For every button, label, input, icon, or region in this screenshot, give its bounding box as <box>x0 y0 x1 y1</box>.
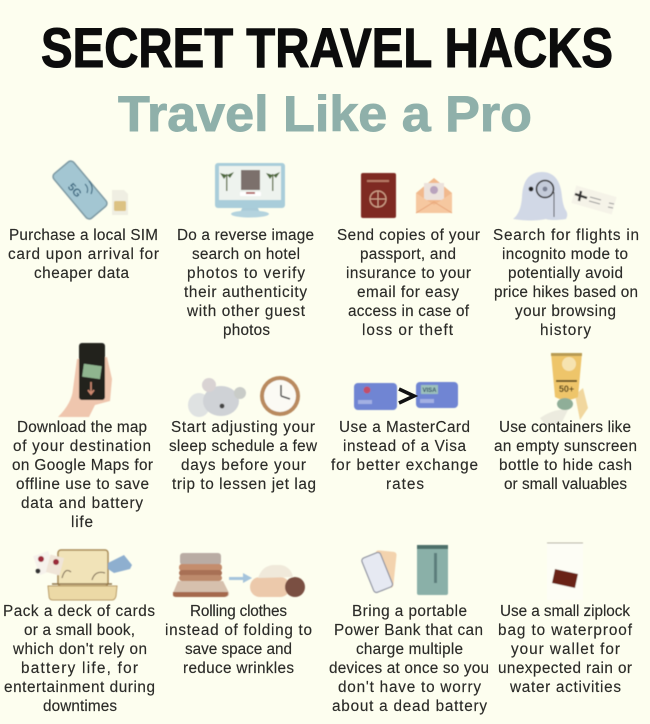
tip text: insurance to your <box>346 265 471 282</box>
tip text: Use a small ziplock <box>500 603 630 620</box>
tip text: trip to lessen jet lag <box>172 476 316 493</box>
tip text: Start adjusting your <box>171 419 315 436</box>
tip text: data and battery <box>21 495 143 512</box>
icon: two credit cards: VISA <box>422 388 437 394</box>
icon: folded clothes, arrow, rolled clothes <box>173 553 305 597</box>
tip text: rates <box>386 476 424 493</box>
tip text <box>329 603 489 715</box>
icon: wallet in ziplock bag <box>547 543 583 600</box>
tip text <box>331 419 478 493</box>
tip text: Rolling clothes <box>190 603 287 620</box>
tip text: downtimes <box>43 698 117 715</box>
tip text: bottle to hide cash <box>499 457 632 474</box>
tip text <box>3 603 155 715</box>
tip text: bag to waterproof <box>498 622 633 639</box>
tip text: their authenticity <box>184 284 307 301</box>
tip text <box>177 227 314 339</box>
icon: monitor with hotel photo <box>215 163 285 218</box>
icon: passport and envelope <box>361 173 452 218</box>
tip text: don't have to worry <box>338 679 481 696</box>
tip text: on Google Maps for <box>12 457 153 474</box>
tip text: price hikes based on <box>494 284 638 301</box>
tip text: entertainment during <box>4 679 155 696</box>
icon: two credit cards <box>354 382 458 410</box>
panel: reverse image search <box>177 163 314 339</box>
tip text: instead of a Visa <box>343 438 466 455</box>
tip text: Bring a portable <box>352 603 467 620</box>
tip text: for better exchange <box>331 457 478 474</box>
icon: sleeping koala and clock <box>188 376 300 417</box>
tip text: card upon arrival for <box>8 246 159 263</box>
tip text: photos to verify <box>187 265 305 282</box>
panel: incognito search <box>493 172 639 339</box>
tip text: devices at once so you <box>329 660 489 677</box>
tip text <box>493 227 639 339</box>
tip text: access in case of <box>348 303 470 320</box>
tip text: reduce wrinkles <box>183 660 294 677</box>
icon: greater-than sign <box>399 389 414 403</box>
title: SECRET TRAVEL HACKS <box>41 17 613 80</box>
icon: sunscreen tube: 50+ <box>559 384 574 394</box>
tip text <box>169 419 318 493</box>
tip text: your browsing <box>515 303 616 320</box>
icon: phone and SIM card <box>51 159 128 221</box>
panel: sleep schedule <box>169 376 318 493</box>
tip text: Pack a deck of cards <box>3 603 155 620</box>
tip text: email for easy <box>357 284 459 301</box>
tip text <box>498 603 633 696</box>
tip text: an empty sunscreen <box>494 438 637 455</box>
tip text: search on hotel <box>192 246 300 263</box>
tip text: or small valuables <box>504 476 627 493</box>
panel: sunscreen containers <box>494 353 637 493</box>
tip text <box>337 227 480 339</box>
tip text: which don't rely on <box>12 641 147 658</box>
panel: ziplock wallet <box>498 543 633 696</box>
icon: phones and power bank <box>361 545 448 595</box>
tip text: Download the map <box>17 419 147 436</box>
tip text: sleep schedule a few <box>169 438 318 455</box>
tip text: charge multiple <box>356 641 463 658</box>
tip text: your wallet for <box>511 641 620 658</box>
tip text: Power Bank that can <box>334 622 483 639</box>
panel: send copies <box>337 173 480 339</box>
tip text <box>494 419 637 493</box>
panel: offline map <box>12 343 153 531</box>
tip text: Send copies of your <box>337 227 480 244</box>
tip text: battery life, for <box>21 660 138 677</box>
tip text: days before your <box>181 457 306 474</box>
tip text: instead of folding to <box>165 622 312 639</box>
tip text <box>165 603 312 677</box>
tip text: about a dead battery <box>332 698 487 715</box>
tip text <box>12 419 153 531</box>
tip text: history <box>540 322 591 339</box>
tip text: water activities <box>509 679 621 696</box>
icon: phone and SIM card: 5G <box>65 181 84 200</box>
panel: local SIM <box>8 159 159 282</box>
tip text: loss or theft <box>362 322 454 339</box>
panel: rolling clothes <box>165 553 312 677</box>
tip text: incognito mode to <box>502 246 628 263</box>
tip text <box>8 227 159 282</box>
tip text: Use a MasterCard <box>339 419 470 436</box>
tip text: unexpected rain or <box>498 660 632 677</box>
tip text: Purchase a local SIM <box>9 227 158 244</box>
tip text: photos <box>223 322 270 339</box>
icon: ghost with monocle and ticket <box>513 172 617 220</box>
icon: hand holding phone with map <box>58 343 112 417</box>
tip text: or a small book, <box>24 622 135 639</box>
tip text: Search for flights in <box>493 227 639 244</box>
tip text: potentially avoid <box>508 265 623 282</box>
tip text: with other guest <box>186 303 306 320</box>
tip text: passport, and <box>360 246 456 263</box>
subtitle: Travel Like a Pro <box>118 86 532 142</box>
tip text: Do a reverse image <box>177 227 314 244</box>
panel: MasterCard <box>331 382 478 493</box>
tip text: cheaper data <box>34 265 129 282</box>
panel: power bank <box>329 545 489 715</box>
tip text: of your destination <box>13 438 151 455</box>
icon: suitcase with playing cards and book <box>33 550 132 600</box>
tip text: save space and <box>185 641 292 658</box>
icon: sunscreen tube <box>540 353 588 426</box>
tip text: Use containers like <box>499 419 631 436</box>
tip text: offline use to save <box>16 476 149 493</box>
panel: deck of cards <box>3 550 155 715</box>
tip text: life <box>71 514 93 531</box>
